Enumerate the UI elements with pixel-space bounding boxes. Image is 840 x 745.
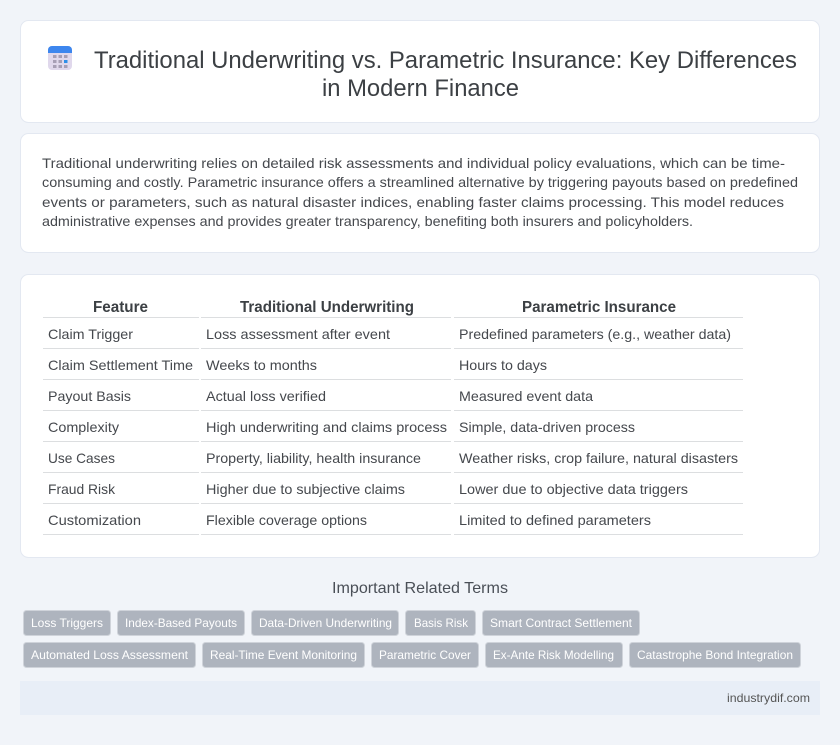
- panel: summary text: [20, 134, 820, 252]
- tag: Real-Time Event Monitoring: [210, 648, 357, 662]
- text block: summary paragraph: Traditional underwriting relies on detailed risk assessments and individual policy evaluations, which can be time-: [42, 155, 785, 171]
- row: payout basis: Measured event data: [459, 388, 593, 404]
- row: claim settlement time: [48, 357, 547, 373]
- row: claim settlement time: Weeks to months: [206, 357, 317, 373]
- table header: [93, 299, 676, 316]
- row: claim settlement time: Claim Settlement Time: [48, 357, 193, 373]
- row: customization: Limited to defined parameters: [459, 512, 651, 528]
- tag: [202, 642, 364, 668]
- title: in Modern Finance: [322, 75, 519, 102]
- row: claim settlement time: Hours to days: [459, 357, 547, 373]
- tag: [406, 610, 476, 636]
- row: use cases: Weather risks, crop failure, natural disasters: [459, 450, 738, 466]
- tag: [24, 642, 196, 668]
- row: complexity: High underwriting and claims process: [206, 419, 447, 435]
- table header: Feature: [93, 299, 148, 316]
- row: fraud risk: Higher due to subjective claims: [206, 481, 405, 497]
- table header: Parametric Insurance: [522, 299, 676, 316]
- tag: Automated Loss Assessment: [31, 648, 189, 662]
- row: complexity: [48, 419, 635, 435]
- row: customization: Customization: [48, 512, 141, 528]
- text block: summary paragraph: events or parameters, such as natural disaster indices, enabling faster claims processing. This model reduces: [42, 194, 784, 210]
- text block: summary paragraph: consuming and costly. Parametric insurance offers a streamlined alternative by triggering payouts based on predefined: [42, 174, 798, 190]
- tag: Data-Driven Underwriting: [259, 616, 392, 630]
- panel: comparison table: [20, 274, 820, 558]
- tag: [482, 610, 640, 636]
- footer: [20, 681, 820, 715]
- panel: title card: [20, 20, 820, 122]
- title: Traditional Underwriting vs. Parametric Insurance: Key Differences: [94, 47, 797, 74]
- text block: summary paragraph: [42, 155, 798, 229]
- tag: [372, 642, 478, 668]
- tag: Basis Risk: [414, 616, 469, 630]
- tag: Index-Based Payouts: [125, 616, 237, 630]
- row: fraud risk: Lower due to objective data triggers: [459, 481, 688, 497]
- tag: [630, 642, 800, 668]
- tag: [252, 610, 398, 636]
- row: use cases: Property, liability, health insurance: [206, 450, 421, 466]
- title: [94, 47, 797, 102]
- heading: related terms: Important Related Terms: [332, 580, 508, 597]
- tag: [118, 610, 244, 636]
- row: fraud risk: [48, 481, 688, 497]
- row: complexity: Simple, data-driven process: [459, 419, 635, 435]
- row: claim trigger: [48, 326, 731, 342]
- text block: summary paragraph: administrative expenses and provides greater transparency, benefiting both insurers and policyholders.: [42, 213, 693, 229]
- tag: [24, 610, 110, 636]
- tag: Loss Triggers: [31, 616, 103, 630]
- row: use cases: Use Cases: [48, 450, 115, 466]
- footer: industrydif.com: [727, 691, 810, 705]
- tag: Smart Contract Settlement: [490, 616, 633, 630]
- row: payout basis: [48, 388, 593, 404]
- row: complexity: Complexity: [48, 419, 119, 435]
- row: payout basis: Payout Basis: [48, 388, 131, 404]
- row: customization: Flexible coverage options: [206, 512, 367, 528]
- row: fraud risk: Fraud Risk: [48, 481, 116, 497]
- table header: Traditional Underwriting: [240, 299, 414, 316]
- row: payout basis: Actual loss verified: [206, 388, 326, 404]
- row: claim trigger: Loss assessment after event: [206, 326, 390, 342]
- icon: calendar: [48, 46, 72, 70]
- tag: Catastrophe Bond Integration: [637, 648, 793, 662]
- row: customization: [48, 512, 651, 528]
- tag: [486, 642, 622, 668]
- tags: related terms: [24, 610, 800, 668]
- row: claim trigger: Predefined parameters (e.g., weather data): [459, 326, 731, 342]
- row: claim trigger: Claim Trigger: [48, 326, 133, 342]
- row: use cases: [48, 450, 738, 466]
- tag: Parametric Cover: [379, 648, 471, 662]
- tag: Ex-Ante Risk Modelling: [493, 648, 614, 662]
